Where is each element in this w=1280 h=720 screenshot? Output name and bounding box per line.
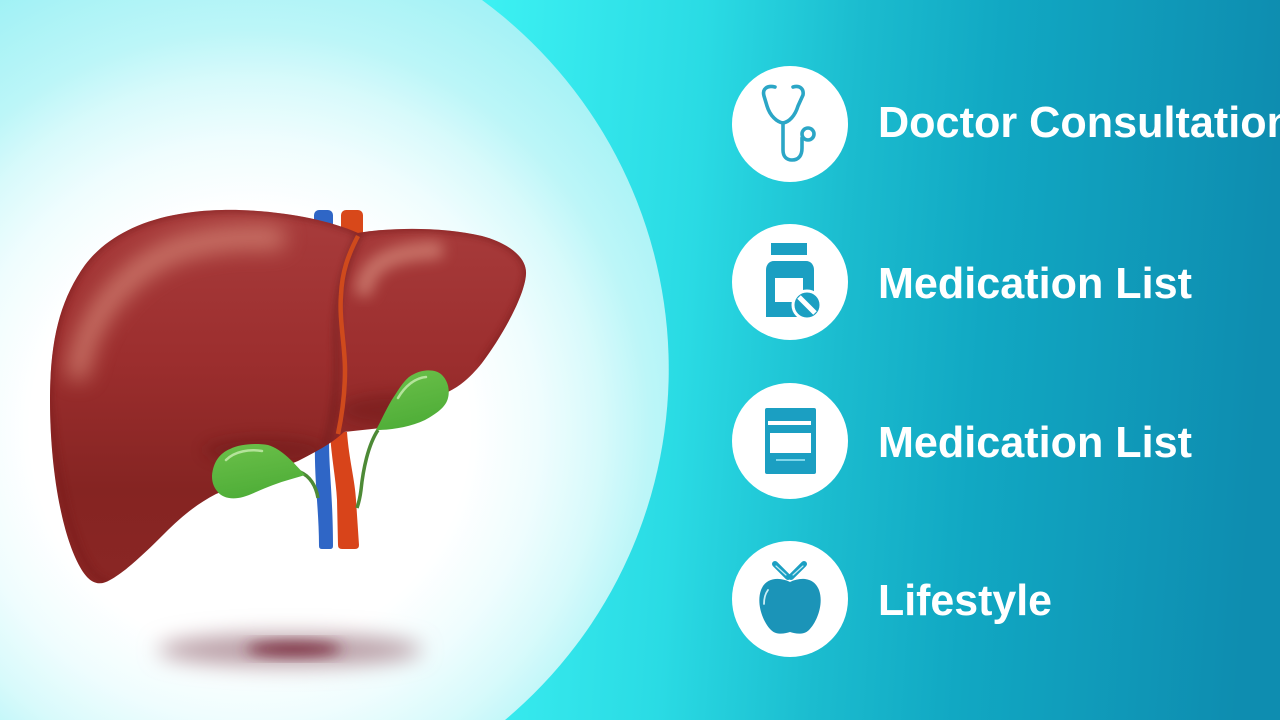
- liver illustration: [50, 210, 526, 583]
- left gallbladder: [212, 444, 318, 498]
- label: medication list: Medication List: [878, 418, 1192, 467]
- underside shade: [344, 392, 396, 426]
- edge rim shade: [50, 210, 526, 580]
- ligament artery line: [338, 236, 358, 434]
- icon: medicine bottle: [732, 224, 848, 340]
- left lobe highlight: [78, 238, 275, 370]
- item: doctor consultation: [732, 66, 1280, 182]
- item: medication list 2: [732, 383, 1192, 499]
- blue vein: [314, 210, 333, 549]
- fissure shade: [326, 233, 360, 445]
- icon: apple: [732, 541, 848, 657]
- white glow circle: [0, 0, 669, 720]
- red artery: [330, 210, 363, 549]
- liver lobes: [50, 210, 526, 583]
- right lobe highlight: [364, 250, 435, 288]
- item: lifestyle: [732, 541, 1052, 657]
- label: medication list: Medication List: [878, 259, 1192, 308]
- liver shadow: [158, 634, 422, 666]
- label: lifestyle: Lifestyle: [878, 576, 1052, 625]
- icon: medicine packet: [732, 383, 848, 499]
- icon: stethoscope: [732, 66, 848, 182]
- item: medication list 1: [732, 224, 1192, 340]
- right gallbladder: [357, 370, 449, 508]
